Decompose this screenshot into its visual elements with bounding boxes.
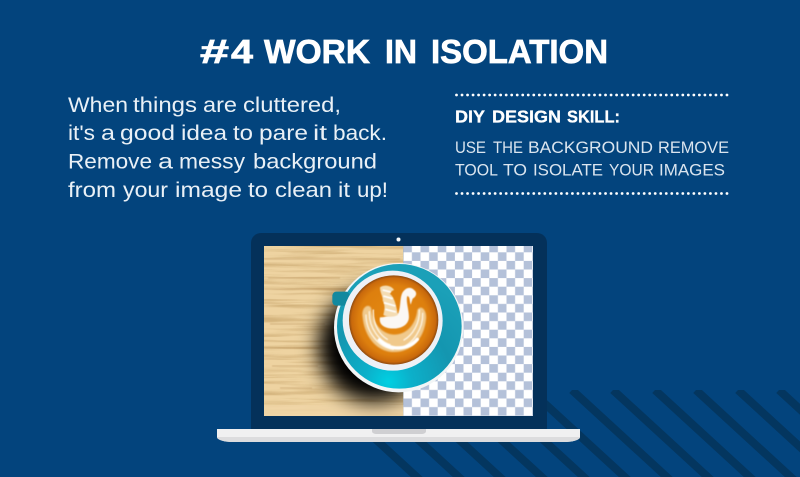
laptop base — [217, 429, 580, 442]
intro text: back. — [333, 122, 387, 145]
callout: DIY design skill — [455, 95, 729, 194]
intro text: up! — [357, 179, 388, 202]
callout: DIY design skill: DIY — [455, 106, 485, 126]
callout: DIY design skill: IMAGES — [659, 160, 725, 180]
callout: DIY design skill: THE — [493, 138, 523, 157]
intro text: idea — [181, 122, 227, 145]
title — [200, 33, 608, 70]
intro text: image — [175, 179, 242, 202]
intro text: Remove — [68, 150, 152, 174]
intro text: a — [101, 122, 115, 145]
intro text: a — [158, 150, 173, 174]
callout: DIY design skill: REMOVE — [658, 138, 729, 157]
intro text: messy — [179, 150, 246, 174]
laptop — [217, 233, 580, 442]
title: 4 — [231, 33, 254, 70]
swan body and neck — [380, 288, 416, 329]
intro text: When — [68, 94, 128, 117]
callout: DIY design skill: BACKGROUND — [528, 138, 653, 157]
saucer — [334, 263, 463, 392]
cup rim — [343, 271, 443, 371]
intro text: background — [253, 150, 377, 174]
intro text: from — [68, 179, 116, 202]
intro text: it's — [68, 122, 95, 145]
intro text: pare — [259, 122, 308, 145]
title: IN — [385, 33, 417, 70]
latte art — [362, 286, 426, 352]
title: ISOLATION — [431, 33, 608, 70]
intro text: to — [248, 179, 268, 202]
intro text: good — [120, 122, 175, 145]
intro text: things — [133, 94, 197, 117]
screen: transparency checkerboard — [403, 246, 533, 416]
intro text: clean — [275, 179, 332, 202]
intro text: your — [123, 179, 168, 202]
intro text: to — [233, 122, 253, 145]
coffee — [349, 275, 438, 365]
intro text: it — [313, 122, 327, 145]
intro text: it — [338, 179, 350, 202]
coffee cup — [332, 263, 463, 392]
camera — [396, 238, 400, 242]
laptop lid — [251, 233, 547, 429]
screen: wood background — [264, 246, 404, 416]
title: # — [200, 33, 229, 70]
callout: DIY design skill: USE — [455, 138, 486, 157]
intro text — [68, 94, 388, 202]
trackpad notch — [372, 429, 426, 434]
callout: DIY design skill: ISOLATE — [533, 160, 603, 180]
callout: DIY design skill: SKILL: — [567, 106, 620, 126]
callout: DIY design skill: YOUR — [609, 160, 654, 180]
callout: DIY design skill: TOOL — [455, 160, 498, 180]
intro text: cluttered, — [243, 94, 341, 117]
intro text: are — [203, 94, 237, 117]
callout: DIY design skill: TO — [503, 160, 527, 180]
title: WORK — [264, 33, 370, 70]
latte ring — [362, 306, 426, 352]
cup handle — [332, 292, 350, 306]
swan wing — [380, 286, 398, 317]
callout: DIY design skill: DESIGN — [492, 106, 561, 126]
